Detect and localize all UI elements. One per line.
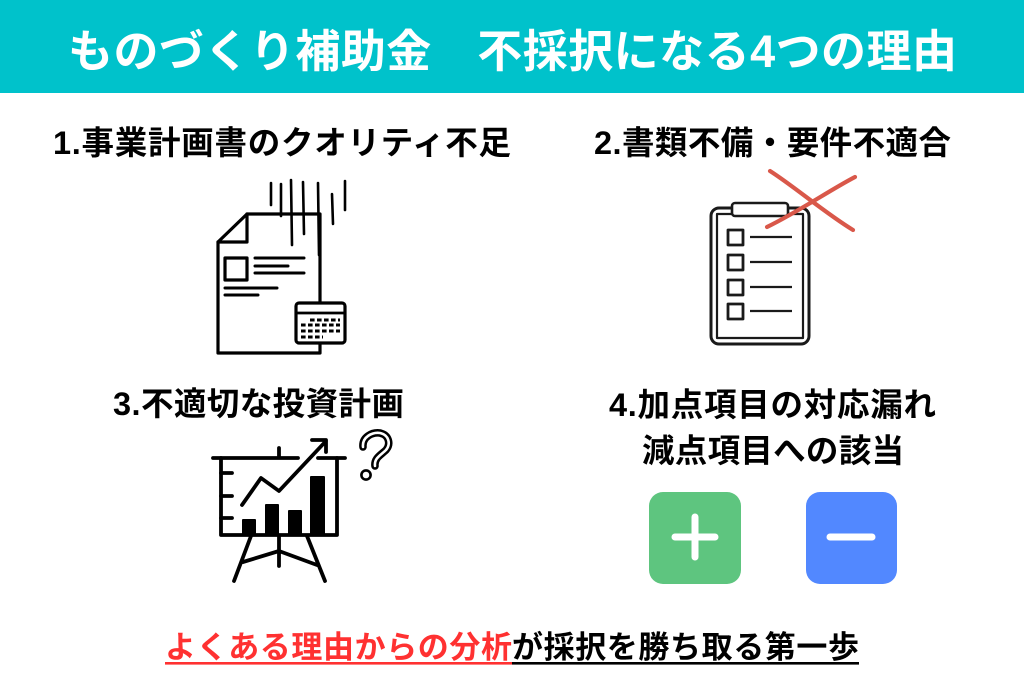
rising arrow xyxy=(242,440,326,505)
title banner: ものづくり補助金 不採択になる4つの理由 xyxy=(68,26,957,77)
heading: reason 4: 減点項目への該当 xyxy=(642,433,904,469)
icon: falling document with calendar xyxy=(218,180,345,353)
heading: reason 4 xyxy=(609,387,936,469)
title banner xyxy=(0,0,1024,93)
closing message: よくある理由からの分析 xyxy=(165,630,512,665)
easel legs xyxy=(234,536,325,581)
heading: reason 2: 2.書類不備・要件不適合 xyxy=(594,125,951,161)
question mark xyxy=(363,433,389,466)
icon: minus button xyxy=(806,492,897,584)
closing message xyxy=(165,630,859,665)
bars xyxy=(242,476,325,535)
closing message: が採択を勝ち取る第一歩 xyxy=(512,630,859,665)
icon: clipboard checklist with red cross xyxy=(711,171,855,344)
icon: presentation board with rising chart and question mark xyxy=(213,433,389,581)
heading: reason 1: 1.事業計画書のクオリティ不足 xyxy=(53,125,511,161)
heading: reason 3: 3.不適切な投資計画 xyxy=(113,386,404,422)
heading: reason 4: 4.加点項目の対応漏れ xyxy=(609,387,936,423)
icon: calendar xyxy=(296,303,345,343)
icon: red cross xyxy=(767,171,855,230)
icon: plus button xyxy=(649,492,741,584)
